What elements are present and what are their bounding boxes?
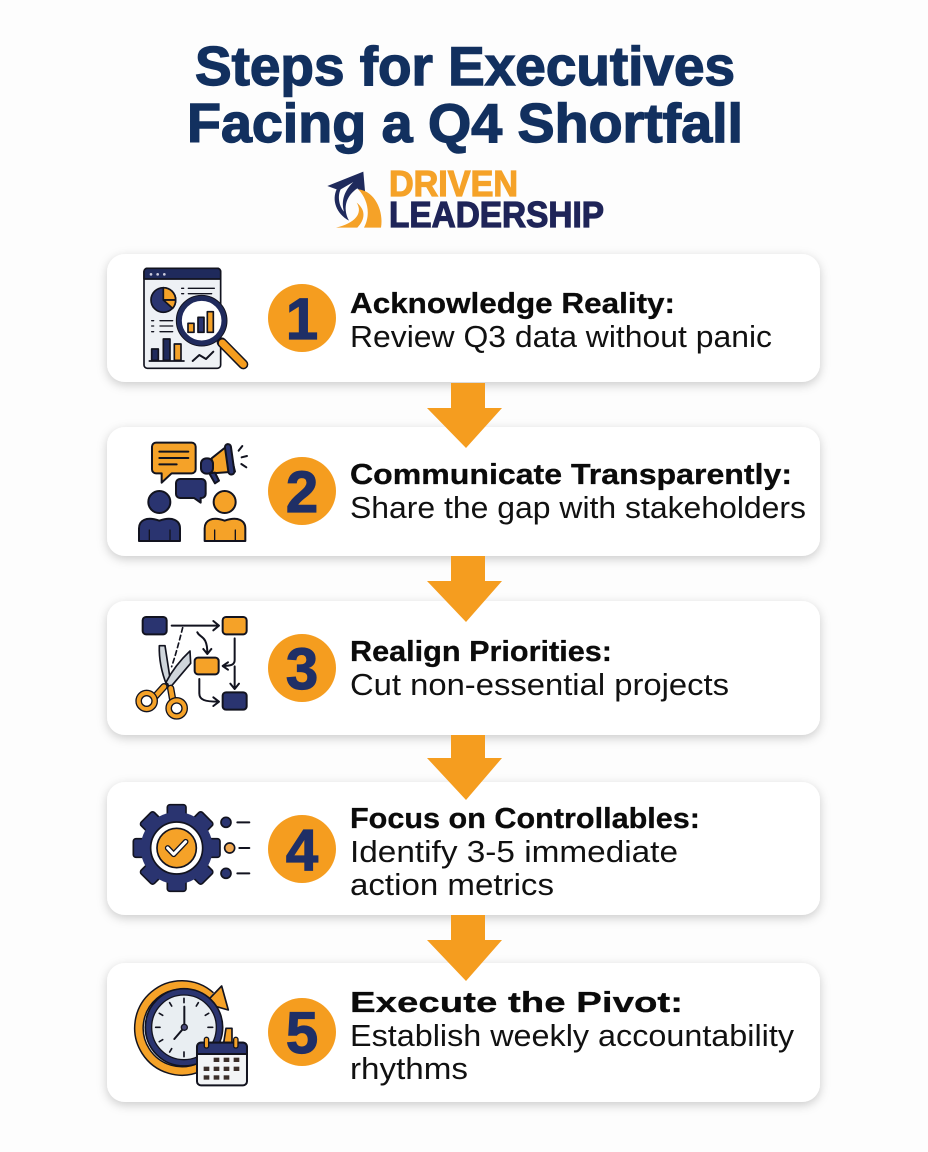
text: step 2 bbox=[350, 459, 806, 525]
number badge 5: 5 bbox=[286, 1001, 318, 1066]
panel: step 1 bbox=[107, 254, 820, 382]
text: step 4: Focus on Controllables: bbox=[350, 803, 700, 835]
number badge 4: 4 bbox=[286, 818, 318, 883]
icon: people communicating with megaphone bbox=[139, 443, 247, 541]
number badge 5 bbox=[268, 998, 336, 1066]
text: step 5: Execute the Pivot: bbox=[350, 987, 683, 1019]
text: step 2: Communicate Transparently: bbox=[350, 459, 792, 491]
logo wordmark bbox=[389, 163, 604, 235]
number badge 4 bbox=[268, 815, 336, 883]
icon: clock with calendar bbox=[139, 985, 247, 1085]
icon: gear with checkmark bbox=[133, 805, 249, 891]
text: step 1: Review Q3 data without panic bbox=[350, 319, 772, 354]
title bbox=[187, 35, 743, 154]
logo: Driven Leadership bbox=[327, 163, 604, 235]
arrow 2 bbox=[427, 556, 502, 622]
title: Steps for Executives bbox=[195, 35, 735, 97]
logo wordmark: LEADERSHIP bbox=[389, 194, 604, 235]
panel: step 4 bbox=[107, 782, 820, 915]
number badge 2: 2 bbox=[286, 460, 318, 525]
icon: workflow with scissors bbox=[139, 617, 247, 716]
panel: step 2 bbox=[107, 427, 820, 556]
title: Facing a Q4 Shortfall bbox=[187, 92, 743, 154]
text: step 5 bbox=[350, 987, 795, 1086]
number badge 1 bbox=[268, 284, 336, 352]
arrow 1 bbox=[427, 383, 502, 448]
arrow 3 bbox=[427, 735, 502, 800]
panel: step 5 bbox=[107, 963, 820, 1102]
text: step 1 bbox=[350, 288, 772, 354]
text: step 3: Realign Priorities: bbox=[350, 636, 612, 668]
icon: logo arrow and road bbox=[327, 172, 382, 228]
text: step 4: action metrics bbox=[350, 867, 554, 902]
text: step 2: Share the gap with stakeholders bbox=[350, 490, 806, 525]
number badge 3: 3 bbox=[286, 637, 318, 702]
text: step 5: Establish weekly accountability bbox=[350, 1018, 795, 1053]
arrow 4 bbox=[427, 915, 502, 981]
number badge 2 bbox=[268, 457, 336, 525]
icon: dashboard with magnifier bbox=[144, 268, 243, 368]
text: step 3: Cut non-essential projects bbox=[350, 667, 729, 702]
text: step 5: rhythms bbox=[350, 1051, 468, 1086]
text: step 4 bbox=[350, 803, 700, 902]
logo wordmark: DRIVEN bbox=[389, 163, 518, 204]
number badge 3 bbox=[268, 634, 336, 702]
panel: step 3 bbox=[107, 601, 820, 735]
text: step 1: Acknowledge Reality: bbox=[350, 288, 675, 320]
number badge 1: 1 bbox=[286, 287, 318, 352]
text: step 4: Identify 3-5 immediate bbox=[350, 834, 678, 869]
text: step 3 bbox=[350, 636, 729, 702]
